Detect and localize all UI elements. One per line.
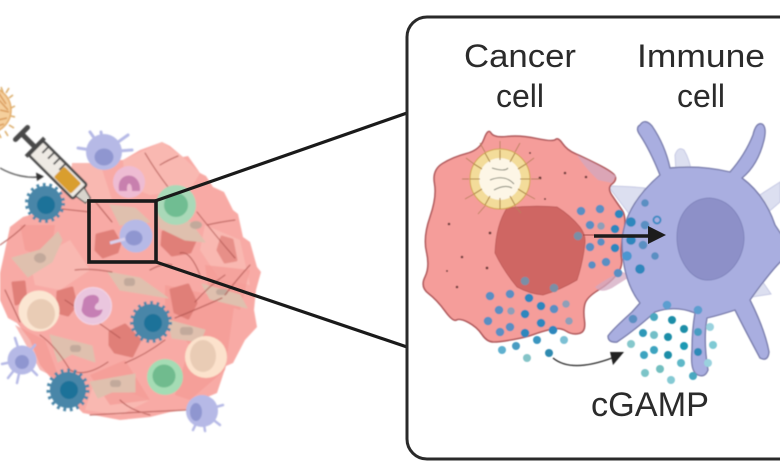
tumor mass — [0, 142, 261, 420]
immune cell nucleus — [677, 198, 744, 280]
released cGAMP dots — [498, 313, 717, 384]
cells diagram — [423, 122, 780, 384]
immune cell body — [608, 122, 780, 376]
curved arrow between cells — [553, 352, 624, 366]
white blood cells: green — [147, 185, 196, 395]
label: immune cell: Immune — [637, 38, 765, 74]
detail panel: cell — [496, 78, 544, 114]
cancer cell body — [423, 131, 625, 342]
virus inside cancer cell — [462, 141, 540, 214]
speckles in cancer cell — [446, 152, 587, 288]
lavender immune cells — [2, 132, 223, 431]
back pseudopods of immune cell — [608, 149, 780, 297]
detail panel: cell — [677, 78, 725, 114]
zoom connector lines — [155, 113, 410, 348]
neutrophils — [74, 166, 145, 324]
tumor illustration — [0, 87, 261, 431]
virus particle — [0, 87, 15, 138]
blue dendritic cells — [28, 186, 169, 408]
syringe — [11, 123, 98, 210]
cancer cell nucleus — [495, 206, 585, 295]
overlap membranes — [577, 155, 631, 291]
detail panel — [407, 17, 780, 459]
blood vessels — [0, 153, 250, 415]
transfer arrow — [583, 226, 666, 244]
dark tumor cell nuclei — [13, 228, 236, 356]
cGAMP dots — [484, 199, 702, 337]
arrow into syringe — [0, 168, 44, 181]
lighter tissue patches — [30, 142, 250, 415]
label: cGAMP: cGAMP — [591, 386, 709, 424]
white blood cells: peach — [18, 290, 227, 378]
zoom region box — [89, 201, 156, 262]
label: cancer cell: Cancer — [464, 38, 576, 74]
fibroblasts — [12, 205, 247, 398]
